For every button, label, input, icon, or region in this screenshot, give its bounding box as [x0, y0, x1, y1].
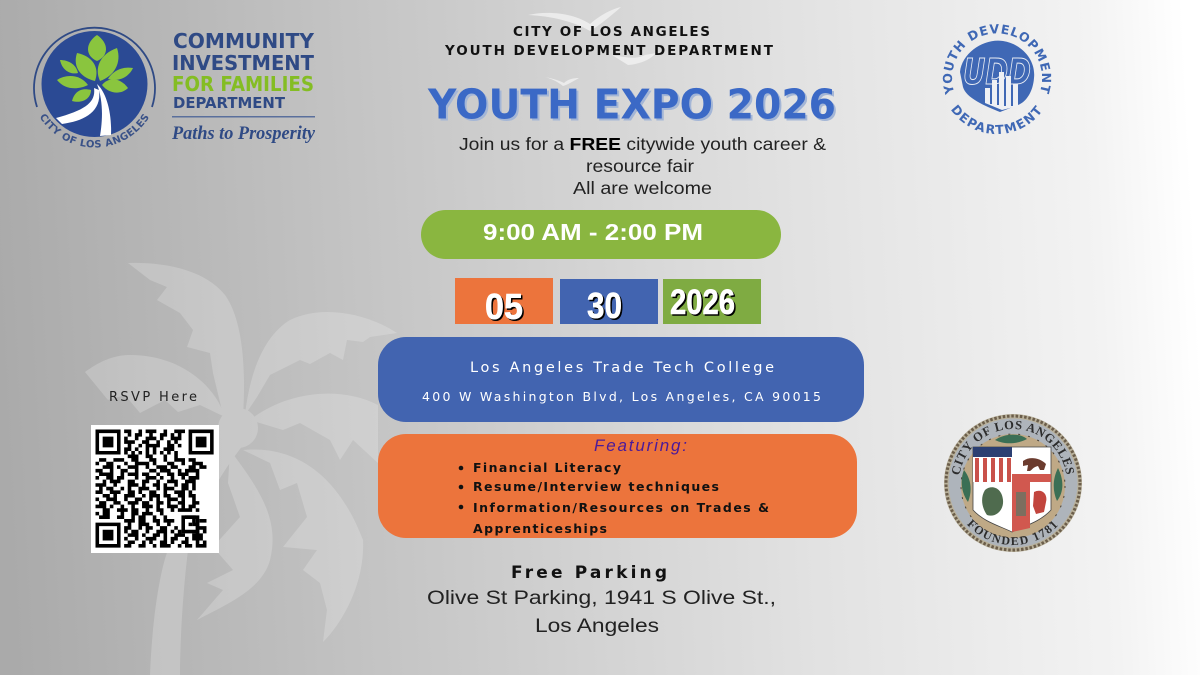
date: year: 2026 [672, 284, 736, 324]
parking information: Free Parking [511, 563, 667, 583]
logo arc text: YOUTH DEVELOPMENT [942, 24, 1052, 96]
parking information: Olive St Parking, 1941 S Olive St., [427, 588, 776, 609]
department name [172, 29, 315, 112]
header organisation text: CITY OF LOS ANGELES [513, 24, 710, 40]
venue panel [378, 337, 864, 422]
QR code [91, 425, 219, 553]
venue panel: 400 W Washington Blvd, Los Angeles, CA 90015 [422, 389, 821, 404]
intro text [459, 134, 826, 198]
date: year [663, 279, 761, 324]
department name: FOR FAMILIES [172, 72, 314, 96]
date: year: 2026 [670, 283, 735, 322]
title: YOUTH EXPO 2026 [429, 82, 838, 130]
time pill: 9:00 AM - 2:00 PM [483, 219, 703, 245]
featuring panel [378, 434, 857, 538]
arc text: CITY OF LOS ANGELES [40, 114, 148, 148]
title: YOUTH EXPO 2026 [427, 80, 836, 128]
logo: Community Investment for Families Department [33, 26, 316, 148]
shield [973, 447, 1051, 532]
bullets [459, 466, 463, 509]
featuring panel: Featuring: [594, 436, 687, 455]
tree trunk [56, 84, 111, 136]
time pill [421, 210, 781, 259]
seal ring [34, 28, 155, 107]
parking information [427, 563, 776, 637]
logo: Youth Development Department: DEPARTMENT [951, 104, 1041, 134]
outer ring [944, 414, 1082, 552]
date: day: 30 [588, 286, 624, 328]
seagull watermarks [528, 7, 656, 86]
venue panel: Los Angeles Trade Tech College [470, 360, 774, 376]
date: day: 30 [587, 285, 622, 326]
department name: DEPARTMENT [173, 94, 286, 112]
UDD letters: UDD [963, 52, 1031, 93]
header organisation text [444, 24, 774, 59]
date: month: 05 [486, 288, 524, 328]
logo: Community Investment for Families Department: Paths to Prosperity [171, 123, 316, 144]
blob emblem [960, 41, 1034, 112]
department name: INVESTMENT [172, 51, 314, 75]
RSVP label: RSVP Here [109, 390, 197, 405]
intro text: All are welcome [573, 178, 712, 198]
red band and tower panel [1012, 474, 1051, 532]
seal: City of Los Angeles: FOUNDED 1781 [966, 518, 1058, 546]
lion [1033, 491, 1046, 514]
feature list: Information/Resources on Trades & [473, 500, 769, 515]
intro text: resource fair [586, 156, 694, 176]
palm tree watermark [85, 263, 397, 675]
feature list: Financial Literacy [473, 460, 621, 475]
feature list [473, 460, 769, 536]
department name: COMMUNITY [173, 29, 315, 53]
logo: Youth Development Department [942, 24, 1052, 134]
flag [973, 447, 1012, 482]
vine decoration [962, 435, 1062, 502]
header organisation text: YOUTH DEVELOPMENT DEPARTMENT [444, 43, 774, 59]
seal: City of Los Angeles [944, 414, 1082, 552]
tree leaves [57, 35, 133, 102]
skyline [985, 72, 1018, 110]
intro text: Join us for a FREE citywide youth career & [459, 134, 826, 154]
date: month: 05 [485, 286, 523, 327]
blue circle [42, 31, 148, 137]
feature list: Apprenticeships [473, 521, 607, 536]
feature list: Resume/Interview techniques [473, 479, 719, 494]
date: month [455, 278, 553, 328]
seal text: CITY OF LOS ANGELES [952, 420, 1074, 474]
eagle [982, 487, 1003, 516]
parking information: Los Angeles [535, 616, 659, 637]
date: day [560, 279, 658, 328]
bear [1023, 458, 1046, 471]
